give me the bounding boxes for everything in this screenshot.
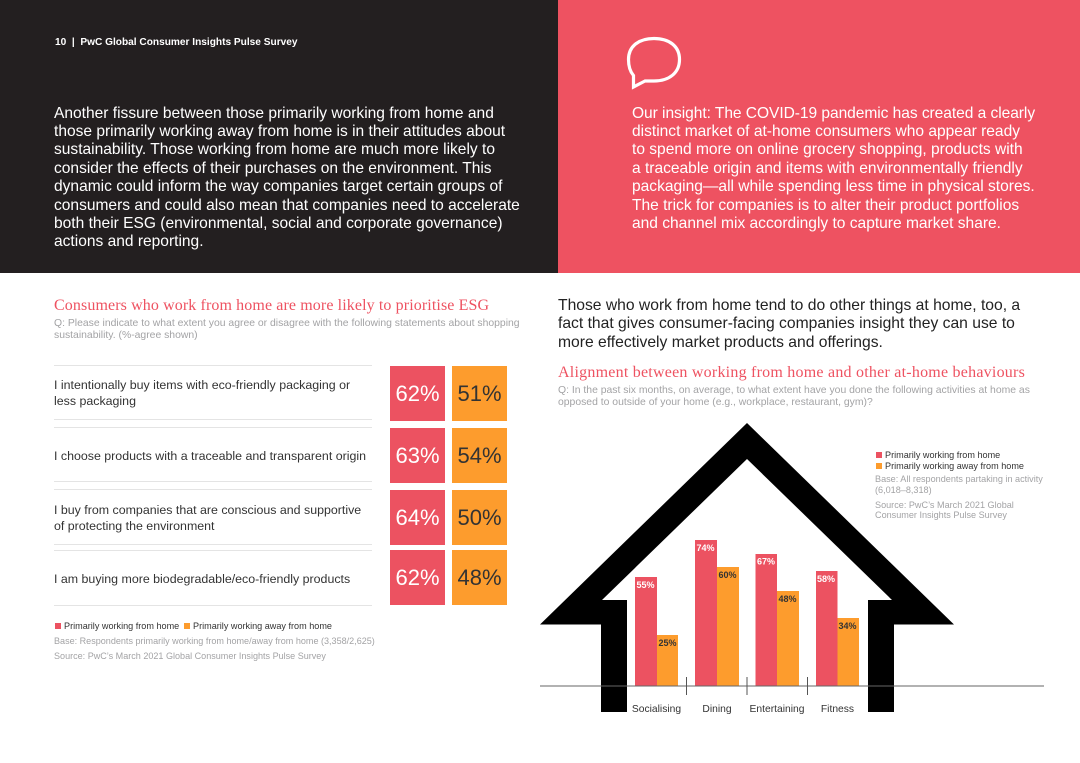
row 2 value: away: 54% bbox=[457, 443, 502, 468]
text block: our insight: distinct market of at-home consumers who appear ready bbox=[632, 123, 1020, 140]
text block: at-home behaviours intro: fact that gives consumer-facing companies insight they can use to bbox=[558, 315, 1015, 332]
page header: 10 | PwC Global Consumer Insights Pulse Survey bbox=[55, 36, 298, 48]
source note: ESG chart: Source: PwC’s March 2021 Global Consumer Insights Pulse Survey bbox=[54, 650, 326, 660]
row 3 label bbox=[54, 502, 361, 532]
text block: sustainability attitudes: consumers and could also mean that companies need to accelerate bbox=[54, 196, 520, 214]
text block: our insight: to spend more on online grocery shopping, products with bbox=[632, 141, 1023, 158]
row 4 value: home: 62% bbox=[395, 565, 440, 590]
text block: sustainability attitudes: dynamic could inform the way companies target certain groups of bbox=[54, 178, 502, 195]
text block: our insight bbox=[632, 104, 1036, 232]
row 3 value: home: 64% bbox=[395, 505, 440, 530]
category labels: Socialising bbox=[632, 704, 681, 715]
text block: at-home behaviours intro: Those who work from home tend to do other things at home, too, a bbox=[558, 297, 1020, 314]
row 1 label bbox=[54, 378, 350, 408]
panel: dark intro bbox=[0, 0, 558, 273]
text block: our insight: Our insight: The COVID-19 pandemic has created a clearly bbox=[632, 104, 1035, 122]
row 4 value: away: 48% bbox=[457, 565, 502, 590]
text block: our insight: a traceable origin and items with environmentally friendly bbox=[632, 160, 1023, 177]
heading: ESG chart: Consumers who work from home are more likely to prioritise ESG bbox=[54, 297, 489, 314]
text block: alignment question bbox=[558, 384, 1030, 408]
bars: dining: 74% bbox=[696, 543, 715, 553]
text block: ESG question: Q: Please indicate to what extent you agree or disagree with the following statements about shopping bbox=[54, 318, 520, 328]
legend: ESG chart bbox=[55, 621, 332, 631]
row 2 value: home bbox=[390, 428, 445, 483]
row 2 label: I choose products with a traceable and transparent origin bbox=[54, 448, 366, 462]
source note: ESG chart bbox=[54, 636, 375, 661]
row 3 value: away: 50% bbox=[457, 505, 502, 530]
source note: alignment chart: Base: All respondents partaking in activity bbox=[875, 474, 1043, 484]
bars: entertaining bbox=[756, 554, 799, 686]
row 3 value: home bbox=[390, 490, 445, 545]
legend: ESG chart: Primarily working from home bbox=[64, 621, 179, 631]
text block: sustainability attitudes: sustainability. Those working from home are much more likely to bbox=[54, 141, 495, 158]
row 1 value: home: 62% bbox=[395, 381, 440, 406]
text block: sustainability attitudes bbox=[54, 104, 520, 250]
source note: alignment chart: Source: PwC’s March 2021 Global bbox=[875, 500, 1014, 510]
row 2 value: home: 63% bbox=[395, 443, 440, 468]
text block: our insight: packaging—all while spending less time in physical stores. bbox=[632, 178, 1035, 195]
bars: dining: 60% bbox=[718, 570, 737, 580]
legend: alignment chart: Primarily working away from home bbox=[885, 460, 1024, 470]
row 2 value: away bbox=[452, 428, 507, 483]
text block: sustainability attitudes: actions and reporting. bbox=[54, 233, 204, 250]
text block: our insight: and channel mix accordingly to capture market share. bbox=[632, 215, 1001, 232]
row 1 label: less packaging bbox=[54, 394, 136, 408]
text block: alignment question: opposed to outside of your home (e.g., workplace, restaurant, gym)? bbox=[558, 397, 873, 408]
panel: insight bbox=[558, 0, 1080, 273]
text block: sustainability attitudes: consider the effects of their purchases on the environment. This bbox=[54, 160, 492, 177]
legend: alignment chart: Primarily working from home bbox=[885, 450, 1000, 460]
text block: at-home behaviours intro bbox=[558, 297, 1020, 351]
row 1 value: home bbox=[390, 366, 445, 421]
table: ESG statements bbox=[54, 365, 507, 606]
row 1 value: away: 51% bbox=[457, 381, 502, 406]
text block: sustainability attitudes: both their ESG (environmental, social and corporate governance) bbox=[54, 215, 503, 232]
bars: fitness: 58% bbox=[817, 574, 835, 584]
row 4 label: I am buying more biodegradable/eco-friendly products bbox=[54, 572, 350, 586]
bars: fitness: 34% bbox=[838, 621, 857, 631]
icon: house outline bbox=[540, 423, 954, 712]
category labels: Dining bbox=[702, 704, 732, 715]
bars: fitness bbox=[816, 571, 859, 686]
icon: speech bubble bbox=[626, 36, 682, 90]
heading: alignment chart: Alignment between working from home and other at-home behaviours bbox=[558, 364, 1025, 381]
text block: sustainability attitudes: those primarily working away from home is in their attitudes about bbox=[54, 123, 505, 140]
bars: entertaining: 67% bbox=[757, 556, 775, 566]
text block: ESG question bbox=[54, 318, 520, 341]
text block: sustainability attitudes: Another fissure between those primarily working from home and bbox=[54, 104, 494, 122]
text block: our insight: The trick for companies is to alter their product portfolios bbox=[632, 196, 1019, 214]
category labels: Fitness bbox=[821, 704, 854, 715]
bars: dining bbox=[695, 540, 739, 686]
source note: alignment chart: Consumer Insights Pulse Survey bbox=[875, 510, 1007, 520]
source note: ESG chart: Base: Respondents primarily working from home/away from home (3,358/2,625) bbox=[54, 636, 375, 646]
text block: alignment question: Q: In the past six months, on average, to what extent have you done the following activities at home as bbox=[558, 384, 1030, 396]
bars: socialising: 55% bbox=[636, 580, 655, 590]
category labels bbox=[632, 704, 854, 715]
row 1 value: away bbox=[452, 366, 507, 421]
row 4 value: home bbox=[390, 550, 445, 605]
bars: entertaining: 48% bbox=[778, 594, 797, 604]
source note: alignment chart bbox=[875, 474, 1043, 520]
row 3 label: I buy from companies that are conscious and supportive bbox=[54, 502, 361, 516]
row 1 label: I intentionally buy items with eco-friendly packaging or bbox=[54, 378, 350, 392]
text block: at-home behaviours intro: more effectively market products and offerings. bbox=[558, 334, 883, 351]
text block: ESG question: sustainability. (%-agree shown) bbox=[54, 330, 198, 341]
source note: alignment chart: (6,018–8,318) bbox=[875, 485, 932, 495]
row 3 label: of protecting the environment bbox=[54, 518, 214, 532]
bars: socialising: 25% bbox=[658, 638, 677, 648]
row 4 value: away bbox=[452, 550, 507, 605]
row 3 value: away bbox=[452, 490, 507, 545]
legend: alignment chart bbox=[876, 450, 1024, 471]
bars: socialising bbox=[635, 577, 678, 686]
legend: ESG chart: Primarily working away from home bbox=[193, 621, 332, 631]
category labels: Entertaining bbox=[750, 704, 805, 715]
